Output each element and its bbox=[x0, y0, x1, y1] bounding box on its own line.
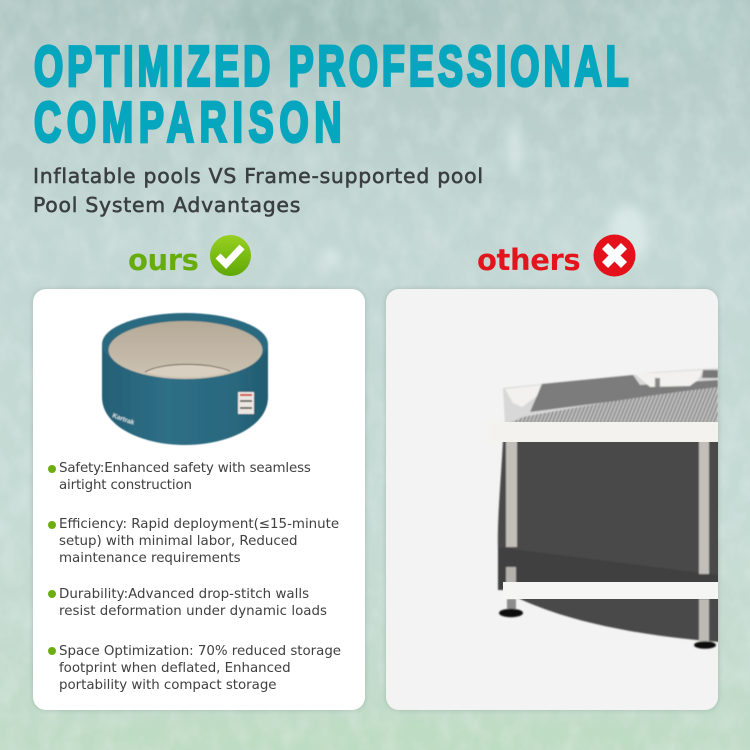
text: efficiency: Efficiency: Rapid deployment(≤15-minute bbox=[59, 517, 339, 532]
text: space: portability with compact storage bbox=[59, 678, 276, 693]
bullet: durability bbox=[48, 590, 56, 598]
text: efficiency bbox=[59, 517, 339, 566]
upper white band bbox=[490, 422, 718, 442]
text: safety: airtight construction bbox=[59, 478, 192, 493]
lower white band bbox=[503, 582, 718, 599]
text: efficiency: setup) with minimal labor, Reduced bbox=[59, 534, 297, 549]
others text: others bbox=[477, 243, 580, 277]
bullet: safety bbox=[48, 465, 56, 473]
pool body bbox=[498, 440, 720, 642]
legs bbox=[506, 440, 517, 547]
subtitle bbox=[33, 164, 484, 217]
product image: inflatable pool: Kartrak bbox=[111, 412, 135, 427]
text: safety: Safety:Enhanced safety with seamless bbox=[59, 461, 311, 476]
ours text: ours bbox=[128, 243, 199, 277]
bullet: efficiency bbox=[48, 521, 56, 529]
text: durability: resist deformation under dynamic loads bbox=[59, 604, 327, 619]
subtitle: Inflatable pools VS Frame-supported pool bbox=[33, 164, 484, 188]
text: efficiency: maintenance requirements bbox=[59, 551, 241, 566]
title: OPTIMIZED PROFESSIONAL bbox=[34, 35, 629, 98]
label: ours bbox=[128, 235, 251, 277]
subtitle: Pool System Advantages bbox=[33, 193, 301, 217]
icon: green check bbox=[210, 235, 251, 276]
text: space bbox=[59, 644, 341, 693]
product image: inflatable pool bbox=[101, 312, 269, 446]
bullet: space bbox=[48, 647, 56, 655]
bullet list bbox=[48, 461, 341, 693]
text: durability: Durability:Advanced drop-stitch walls bbox=[59, 587, 309, 602]
title bbox=[34, 35, 629, 154]
text: space: Space Optimization: 70% reduced storage bbox=[59, 644, 341, 659]
text: safety bbox=[59, 461, 311, 493]
lower strap bbox=[498, 547, 720, 590]
text: durability bbox=[59, 587, 327, 619]
label: others bbox=[477, 234, 636, 277]
title: COMPARISON bbox=[34, 91, 342, 154]
text: space: footprint when deflated, Enhanced bbox=[59, 661, 291, 676]
product image: frame pool bbox=[496, 368, 718, 650]
panel: ours bbox=[33, 289, 365, 710]
top rim bbox=[503, 368, 718, 425]
panel: others bbox=[386, 289, 718, 710]
icon: red cross bbox=[594, 234, 636, 276]
